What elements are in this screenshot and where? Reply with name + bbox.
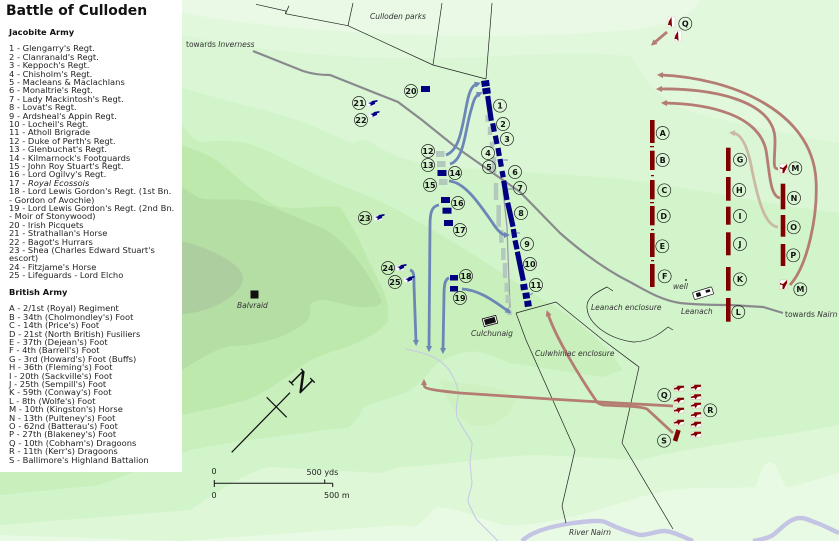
list: British regiments: I - 20th (Sackville's) Foot <box>9 371 112 381</box>
Jacobite second line earlier positions <box>436 151 448 185</box>
list: British regiments: A - 2/1st (Royal) Regiment <box>9 303 119 313</box>
British regiment letter badges: L <box>736 308 741 317</box>
list: British regiments: F - 4th (Barrell's) Foot <box>9 345 100 355</box>
British regiment letter badges: M <box>796 285 804 294</box>
scale bar: 0 <box>211 467 217 476</box>
panel: legend <box>0 0 182 472</box>
list: Jacobite regiments: 4 - Chisholm's Regt. <box>9 69 92 79</box>
list: Jacobite regiments: 24 - Fitzjame's Horse <box>9 262 96 272</box>
British regiment letter badges: M <box>791 164 799 173</box>
scale bar: 500 yds <box>306 468 338 477</box>
list: Jacobite regiments: - Moir of Stonywood) <box>9 211 96 221</box>
Jacobite small skirmish arrows <box>503 160 533 295</box>
place names: Culwhiniac enclosure <box>535 349 615 358</box>
walls: Culloden parks <box>256 3 492 79</box>
list: British regiments: E - 37th (Dejean's) Foot <box>9 337 108 347</box>
list: Jacobite regiments: 15 - John Roy Stuart's Regt. <box>9 161 124 171</box>
Jacobite regiment number badges: 8 <box>518 209 524 218</box>
Jacobite regiment number badges: 22 <box>355 116 367 125</box>
building: Leanach <box>692 287 714 300</box>
British regiment letter badges <box>656 17 807 447</box>
Jacobite horse: 25 <box>404 276 414 282</box>
British horse: M <box>780 164 787 289</box>
place names: towards Inverness <box>186 40 255 49</box>
Jacobite regiment number badges: 13 <box>422 161 434 170</box>
list: British regiments: M - 10th (Kingston's) Horse <box>9 404 123 414</box>
Jacobite regiment number badges: 18 <box>460 272 472 281</box>
list: Jacobite regiments: - Gordon of Avochie) <box>9 195 94 205</box>
list: British regiments: R - 11th (Kerr's) Dragoons <box>9 446 118 456</box>
British dragoons: Q and R squadrons <box>674 385 701 437</box>
scale bar <box>211 467 350 500</box>
list: British regiments: D - 21st (North British) Fusiliers <box>9 329 140 339</box>
list: British regiments: K - 59th (Conway's) Foot <box>9 387 112 397</box>
list: Jacobite regiments: 22 - Bagot's Hurrars <box>9 237 93 247</box>
British regiment letter badges: P <box>790 251 796 260</box>
place names: well <box>673 282 689 291</box>
Jacobite regiment number badges: 21 <box>353 99 365 108</box>
list: Jacobite regiments: 25 - Lifeguards - Lord Elcho <box>9 270 123 280</box>
north arrow compass <box>232 364 319 452</box>
British regiment letter badges: C <box>661 186 667 195</box>
place names: River Nairn <box>569 528 611 537</box>
Jacobite regiment number badges: 4 <box>485 149 491 158</box>
Jacobite blue line regiments <box>488 96 523 281</box>
list: Jacobite regiments: 6 - Monaltrie's Regt. <box>9 85 93 95</box>
list: British regiments <box>8 303 149 465</box>
list: Jacobite regiments: 11 - Atholl Brigrade <box>9 127 90 137</box>
Jacobite regiment number badges: 10 <box>524 260 536 269</box>
Jacobite regiment number badges: 17 <box>454 226 466 235</box>
British pale arrow: regiment O <box>733 133 778 227</box>
place names: Culloden parks <box>370 12 426 21</box>
British regiment letter badges: O <box>790 223 797 232</box>
list: Jacobite regiments: 2 - Clanranald's Regt. <box>9 52 99 62</box>
Jacobite regiment number badges: 24 <box>382 264 394 273</box>
Jacobite regiment number badges: 16 <box>452 199 464 208</box>
list: Jacobite regiments: 9 - Ardsheal's Appin Regt. <box>9 111 117 121</box>
list: British regiments: J - 25th (Sempill's) Foot <box>9 379 106 389</box>
list: Jacobite regiments: 3 - Keppoch's Regt. <box>9 60 89 70</box>
list: Jacobite regiments: 18 - Lord Lewis Gordon's Regt. (1st Bn. <box>9 186 171 196</box>
British regiment letter badges: S <box>661 436 667 446</box>
Jacobite horse: 23 <box>374 214 384 220</box>
British regiment letter badges: R <box>707 406 713 415</box>
list: Jacobite regiments <box>9 43 174 280</box>
building: Balvraid <box>250 290 258 298</box>
place names: Leanach enclosure <box>591 303 662 312</box>
Jacobite regiment blocks <box>421 80 532 307</box>
Jacobite regiment number badges: 7 <box>517 184 523 193</box>
list: British regiments: O - 62nd (Batterau's) Foot <box>9 421 118 431</box>
Jacobite regiment number badges: 9 <box>524 240 530 249</box>
walls: Leanach enclosure <box>587 287 673 342</box>
Jacobite regiment number badges <box>352 84 542 304</box>
list: Jacobite regiments: 19 - Lord Lewis Gordon's Regt. (2nd Bn. <box>9 203 174 213</box>
British regiment letter badges: E <box>660 242 665 251</box>
British regiment letter badges: J <box>738 240 742 249</box>
place names: Culchunaig <box>471 329 513 338</box>
title: Battle of Culloden <box>6 3 147 19</box>
British regiment letter badges: H <box>736 186 743 195</box>
list: British regiments: B - 34th (Cholmondley's) Foot <box>9 312 133 322</box>
Jacobite regiment number badges: 19 <box>454 294 466 303</box>
Jacobite regiment number badges: 20 <box>405 87 417 96</box>
list: Jacobite regiments: escort) <box>9 253 38 263</box>
British regiment: Ballimore's battalion <box>675 430 678 441</box>
list: British regiments: Q - 10th (Cobham's) Dragoons <box>9 438 136 448</box>
north arrow compass: N <box>283 364 319 400</box>
walls: Culwhiniac enclosure <box>516 302 673 529</box>
Jacobite horse: 21 <box>367 100 378 106</box>
road: branch to Culchunaig <box>503 190 510 308</box>
list: Jacobite regiments: 16 - Lord Ogilvy's Regt. <box>9 169 106 179</box>
well marker <box>685 279 687 281</box>
Jacobite horse: 24 <box>396 264 406 270</box>
list: British regiments: N - 13th (Pulteney's) Foot <box>9 413 115 423</box>
British red advance arrows <box>424 32 816 433</box>
Jacobite regiment number badges: 23 <box>359 214 371 223</box>
list: Jacobite regiments: 12 - Duke of Perth's Regt. <box>9 136 116 146</box>
Jacobite regiment number badges: 11 <box>530 281 542 290</box>
list: British regiments: S - Ballimore's Highland Battalion <box>9 455 149 465</box>
list: Jacobite regiments: 8 - Lovat's Regt. <box>9 102 77 112</box>
Jacobite regiment number badges: 2 <box>500 120 506 129</box>
list: Jacobite regiments: 10 - Locheil's Regt. <box>9 119 88 129</box>
list: Jacobite regiments: 20 - Irish Picquets <box>9 220 84 230</box>
British regiment letter badges: Q <box>682 20 689 28</box>
list: Jacobite regiments: 17 - Royal Ecossois <box>9 178 89 188</box>
British regiment letter badges: A <box>660 129 667 138</box>
Jacobite blue advance arrows <box>410 84 508 350</box>
British regiment letter badges: K <box>737 275 744 284</box>
list: British regiments: G - 3rd (Howard's) Foot (Buffs) <box>9 354 136 364</box>
British regiment letter badges: G <box>737 156 743 164</box>
place names: towards Nairn <box>785 310 838 319</box>
list: Jacobite regiments: 13 - Glenbuchat's Regt. <box>9 144 107 154</box>
British regiment letter badges: I <box>739 212 742 221</box>
list: Jacobite regiments: 23 - Shea (Charles Edward Stuart's <box>9 245 155 255</box>
British dragoons: upper Q <box>668 17 682 41</box>
heading: British Army: British Army <box>9 287 67 297</box>
Jacobite regiment number badges: 15 <box>424 181 436 190</box>
British regiment letter badges: Q <box>661 391 668 400</box>
list: Jacobite regiments: 5 - Macleans & Maclachlans <box>9 77 125 87</box>
heading: Jacobite Army: Jacobite Army <box>9 27 74 37</box>
list: Jacobite regiments: 21 - Strathallan's Horse <box>9 228 107 238</box>
river: River Nairn <box>522 518 839 541</box>
Jacobite regiment number badges: 25 <box>389 278 401 287</box>
place names <box>186 12 838 537</box>
list: Jacobite regiments: 1 - Glengarry's Regt. <box>9 43 95 53</box>
Jacobite regiment number badges: 3 <box>504 135 510 144</box>
list: British regiments: C - 14th (Price's) Foot <box>9 320 99 330</box>
British front and second line regiments <box>650 120 785 322</box>
list: British regiments: H - 36th (Fleming's) Foot <box>9 362 112 372</box>
place names: Leanach <box>681 307 713 316</box>
road: towards Inverness and Nairn <box>253 51 783 313</box>
British regiment letter badges: B <box>660 156 666 165</box>
British regiment letter badges: F <box>662 272 667 281</box>
scale bar: 0 <box>211 491 217 500</box>
list: British regiments: L - 8th (Wolfe's) Foot <box>9 396 96 406</box>
list: British regiments: P - 27th (Blakeney's) Foot <box>9 429 116 439</box>
list: Jacobite regiments: 14 - Kilmarnock's Footguards <box>9 153 130 163</box>
British regiment letter badges: N <box>791 194 797 203</box>
Jacobite front line earlier position <box>488 115 509 315</box>
British regiment letter badges: D <box>660 212 667 221</box>
Jacobite regiment number badges: 1 <box>497 102 503 110</box>
Jacobite regiment number badges: 14 <box>449 169 461 178</box>
Jacobite horse: 22 <box>369 111 380 118</box>
place names: Balvraid <box>237 301 268 310</box>
scale bar: 500 m <box>324 491 350 500</box>
list: Jacobite regiments: 7 - Lady Mackintosh's Regt. <box>9 94 124 104</box>
building: Culchunaig <box>482 315 498 327</box>
Jacobite regiment number badges: 12 <box>422 147 434 156</box>
Jacobite regiment number badges: 5 <box>486 163 492 172</box>
stream <box>406 349 498 541</box>
Jacobite regiment number badges: 6 <box>512 168 518 177</box>
